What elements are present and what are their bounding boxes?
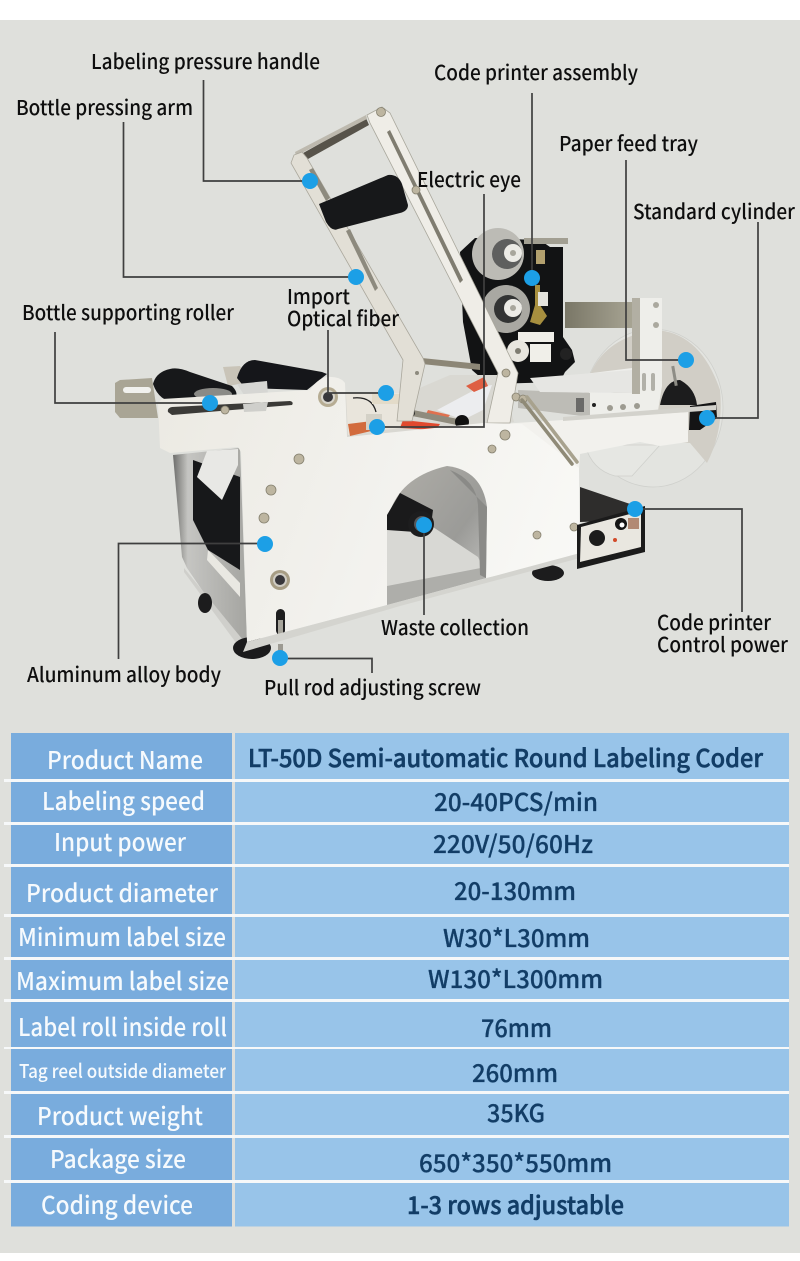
label feed bay (345, 375, 514, 438)
callout: Bottle pressing arm: Bottle pressing arm (16, 91, 193, 121)
row: Tag reel outside diameter: Tag reel outside diameter (19, 1057, 226, 1084)
spring rods (522, 397, 577, 464)
callout: Labeling pressure handle: Labeling pressure handle (91, 45, 320, 75)
callout: Code printer assembly (434, 56, 638, 286)
row: Product Name (11, 733, 789, 779)
paper feed tray (500, 298, 717, 470)
pressing arm (291, 107, 518, 423)
callout: Labeling pressure handle (91, 45, 320, 189)
row: Label roll inside roll: 76mm (481, 1010, 552, 1045)
row: Product diameter (11, 867, 789, 914)
callout: Pull rod adjusting screw (264, 650, 481, 701)
callout: Aluminum alloy body: Aluminum alloy body (27, 658, 221, 688)
row: Labeling speed: 20-40PCS/min (434, 784, 598, 819)
callout: Code printer Control power: Control power (657, 628, 789, 658)
right plate (367, 107, 518, 423)
machine illustration (115, 107, 723, 659)
row: Label roll inside roll: Label roll inside roll (18, 1009, 227, 1044)
callout: Bottle supporting roller: Bottle supporting roller (22, 296, 235, 326)
row: Coding device: 1-3 rows adjustable (407, 1187, 624, 1222)
row: Product Name: LT-50D Semi-automatic Round Labeling Coder (248, 740, 764, 775)
row: Product weight (11, 1094, 789, 1135)
callout: Waste collection: Waste collection (381, 611, 529, 641)
callout: Standard cylinder (633, 195, 796, 426)
lower bearing (270, 570, 290, 590)
top rod (296, 118, 369, 164)
row: Labeling speed (11, 782, 789, 822)
row: Product Name: Product Name (47, 742, 203, 777)
row: Input power (11, 824, 789, 864)
black roller (319, 175, 408, 230)
callout: Aluminum alloy body (27, 536, 273, 688)
callout: Code printer assembly: Code printer assembly (434, 56, 638, 86)
row: Minimum label size: W30*L30mm (443, 920, 590, 955)
row: Product weight: Product weight (37, 1098, 203, 1133)
rear bracket and rollers (115, 360, 327, 418)
row: Maximum label size: Maximum label size (16, 963, 229, 998)
callout: Bottle pressing arm (16, 91, 364, 285)
bearing (318, 387, 338, 407)
callout: Electric eye: Electric eye (417, 163, 521, 193)
row: Product diameter: Product diameter (26, 875, 219, 910)
callout: Code printer Control power: Code printer (657, 606, 772, 636)
code printer assembly (460, 228, 637, 384)
callout: Code printer Control power (627, 501, 789, 658)
rear housing (173, 448, 247, 652)
bolts (221, 406, 229, 414)
callout: Paper feed tray (559, 127, 698, 368)
callout: Import Optical fiber: Optical fiber (287, 302, 400, 332)
lower rod (412, 357, 480, 370)
callout: Pull rod adjusting screw: Pull rod adjusting screw (264, 671, 481, 701)
row: Label roll inside roll (11, 1002, 789, 1047)
adjusting slot (276, 609, 285, 635)
waste collection arch (387, 466, 487, 605)
row separators (4, 779, 789, 1183)
callout: Import Optical fiber (287, 280, 400, 401)
row: Package size: Package size (50, 1141, 186, 1176)
main body plate (158, 377, 580, 642)
row: Coding device (11, 1183, 789, 1226)
row: Coding device: Coding device (41, 1187, 193, 1222)
row: Product diameter: 20-130mm (454, 873, 576, 908)
callout: Waste collection (381, 517, 529, 641)
hub and shaft (660, 380, 697, 405)
row: Minimum label size: Minimum label size (18, 919, 226, 954)
row: Input power: 220V/50/60Hz (433, 826, 593, 861)
row: Maximum label size: W130*L300mm (428, 961, 603, 996)
specification table (4, 733, 789, 1226)
row: Maximum label size (11, 960, 789, 999)
label reel disc (583, 329, 723, 487)
callout: Import Optical fiber: Import (287, 280, 350, 310)
row: Labeling speed: Labeling speed (42, 783, 205, 818)
code printer control box (577, 487, 645, 569)
row: Package size (11, 1138, 789, 1180)
base strip (243, 553, 580, 652)
row: Tag reel outside diameter (11, 1049, 789, 1091)
plate slot (168, 401, 293, 415)
row: Input power: Input power (54, 824, 187, 859)
row: Product weight: 35KG (487, 1095, 545, 1130)
callout: Bottle supporting roller (22, 296, 235, 411)
row: Minimum label size (11, 917, 789, 957)
callout: Electric eye (369, 163, 521, 435)
row: Package size: 650*350*550mm (419, 1145, 612, 1180)
callout: Paper feed tray: Paper feed tray (559, 127, 698, 157)
row: Tag reel outside diameter: 260mm (472, 1055, 558, 1090)
feet (198, 565, 564, 659)
left plate (291, 152, 425, 421)
tan support bar (565, 302, 637, 328)
under bar (500, 412, 688, 470)
